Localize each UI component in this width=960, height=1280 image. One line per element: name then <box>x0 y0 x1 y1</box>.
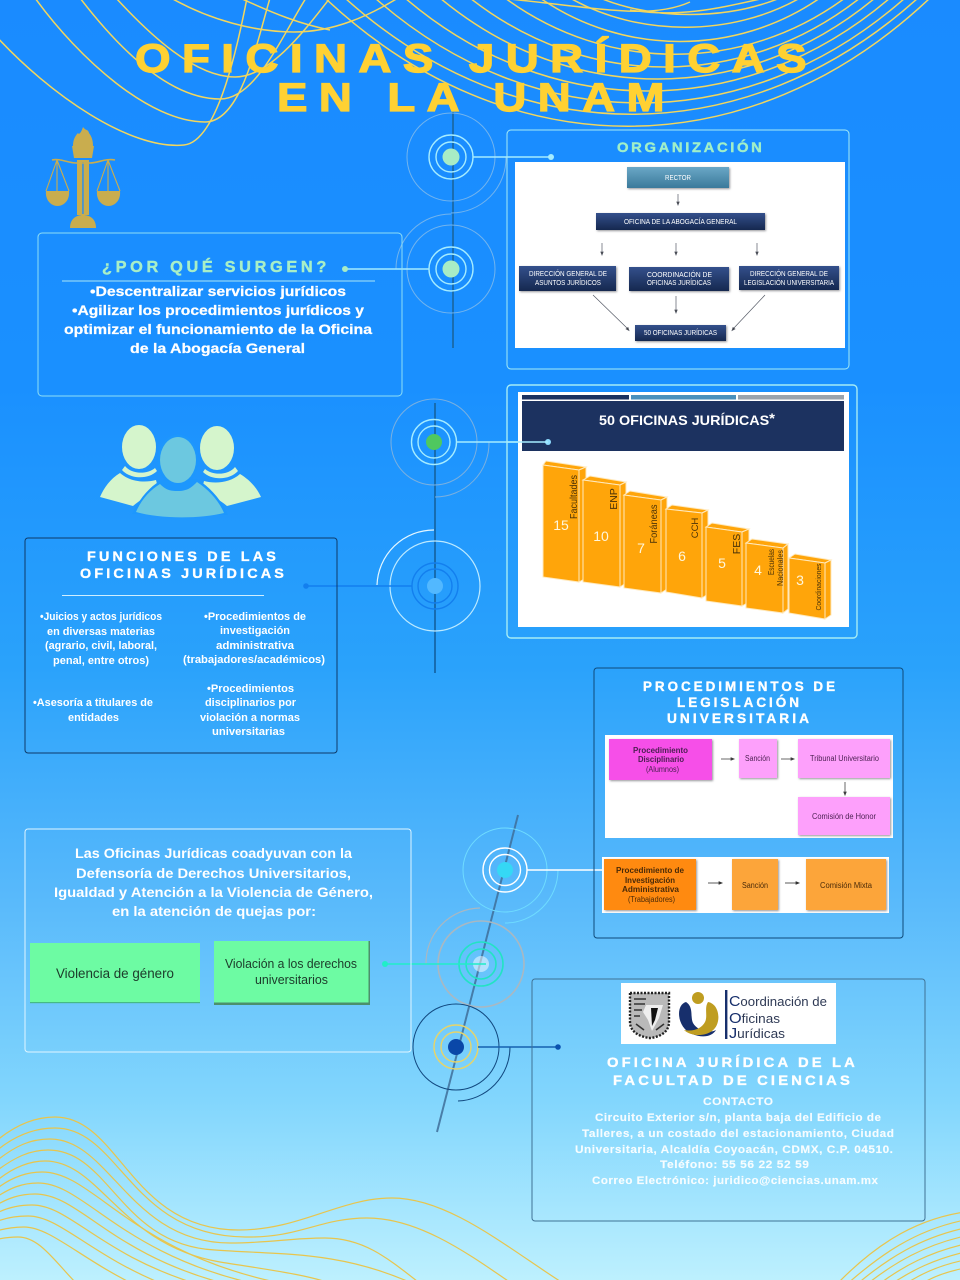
box: violación a los derechos: universitarios <box>255 973 328 987</box>
panel: defensoría <box>25 829 411 1052</box>
org chart: LEGISLACIÓN UNIVERSITARIA <box>744 278 834 287</box>
flow: procedimiento disciplinario <box>605 735 893 838</box>
list: funciones derecha <box>183 611 325 738</box>
list: funciones derecha: •Procedimientos <box>207 683 294 695</box>
panel: funciones <box>25 538 337 753</box>
logos <box>621 983 836 1044</box>
header band <box>522 401 844 451</box>
node: funciones <box>303 530 480 631</box>
title: OFICINAS JURÍDICAS <box>135 36 818 81</box>
flow: investigación administrativa: Comisión Mixta <box>820 881 873 890</box>
text: contacto: Correo Electrónico: juridico@ciencias.unam.mx <box>592 1175 879 1187</box>
list: funciones derecha: violación a normas <box>200 712 300 724</box>
stepped bar chart: 6 <box>678 548 686 564</box>
flow: procedimiento disciplinario: Tribunal Universitario <box>810 754 879 763</box>
stepped bar chart <box>543 461 831 619</box>
text: defensoría: Defensoría de Derechos Universitarios, <box>76 865 351 881</box>
title <box>135 36 818 120</box>
list: funciones izquierda: •Asesoría a titulares de <box>33 697 153 709</box>
text: contacto: Universitaria, Alcaldía Coyoacán, CDMX, C.P. 04510. <box>575 1144 894 1156</box>
decorative waves top <box>0 0 930 145</box>
node: contacto <box>413 1004 561 1101</box>
panel: contacto <box>532 979 925 1221</box>
list: funciones derecha: •Procedimientos de <box>204 611 306 623</box>
text: motivos: de la Abogacía General <box>130 341 305 356</box>
timeline: lower diagonal axis <box>437 815 518 1132</box>
text: motivos: •Descentralizar servicios jurídicos <box>90 284 346 299</box>
stepped bar chart: 5 <box>718 555 726 571</box>
panel: por qué surgen <box>38 233 402 396</box>
stepped bar chart: 4 <box>754 562 762 578</box>
stepped bar chart: Facultades <box>568 475 580 519</box>
list: funciones izquierda: (agrario, civil, laboral, <box>45 640 157 652</box>
org chart: OFICINAS JURÍDICAS <box>647 278 711 287</box>
box: violación a los derechos <box>214 941 370 1005</box>
timeline: upper vertical axis <box>452 112 454 348</box>
flow: investigación administrativa <box>602 857 889 913</box>
list: funciones izquierda: entidades <box>68 712 119 724</box>
panel: procedimientos de legislación <box>594 668 903 938</box>
heading: por qué surgen: ¿POR QUÉ SURGEN? <box>102 257 330 276</box>
text: motivos: optimizar el funcionamiento de la Oficina <box>64 322 373 337</box>
list: funciones derecha: universitarias <box>212 726 285 738</box>
stepped bar chart: Coordinaciones <box>814 563 823 610</box>
icon: group of people <box>100 425 261 517</box>
org chart <box>515 154 845 348</box>
node: por qué surgen <box>342 214 495 313</box>
list: funciones izquierda: en diversas materias <box>47 626 155 638</box>
header band: 50 OFICINAS JURÍDICAS <box>599 413 759 428</box>
org chart: OFICINA DE LA ABOGACÍA GENERAL <box>624 217 737 226</box>
box: violación a los derechos: Violación a los derechos <box>225 957 357 971</box>
panel: organización <box>507 130 849 369</box>
heading: funciones <box>80 549 287 581</box>
stepped bar chart: 3 <box>796 572 804 588</box>
title: EN LA UNAM <box>277 76 676 120</box>
text: contacto: Teléfono: 55 56 22 52 59 <box>660 1159 810 1171</box>
heading: funciones: FUNCIONES DE LAS <box>87 549 279 564</box>
heading: organización: ORGANIZACIÓN <box>617 138 764 155</box>
list: funciones izquierda: •Juicios y actos jurídicos <box>40 611 162 623</box>
text: contacto: Circuito Exterior s/n, planta baja del Edificio de <box>595 1112 882 1124</box>
text: coordinación <box>729 993 827 1042</box>
stepped bar chart: CCH <box>690 518 701 538</box>
text: defensoría: en la atención de quejas por: <box>112 903 316 919</box>
org chart: 50 OFICINAS JURÍDICAS <box>644 328 717 337</box>
stepped bar chart: Escuelas <box>767 549 776 575</box>
org chart: RECTOR <box>665 175 691 182</box>
list: funciones izquierda <box>33 611 162 724</box>
flow: procedimiento disciplinario: Sanción <box>745 754 770 763</box>
icon: scales of justice with torch <box>46 127 120 228</box>
text: coordinación: Coordinación de <box>729 993 827 1010</box>
stepped bar chart: Nacionales <box>776 550 785 586</box>
node: procedimientos <box>463 828 602 923</box>
flow: procedimiento disciplinario: Procedimiento <box>633 746 688 755</box>
flow: investigación administrativa: Sanción <box>742 881 768 890</box>
list: funciones derecha: disciplinarios por <box>205 697 297 709</box>
stepped bar chart: 10 <box>593 528 609 544</box>
panel: 50 oficinas jurídicas <box>507 385 857 638</box>
stepped bar chart: FES <box>731 534 743 554</box>
flow: procedimiento disciplinario: Disciplinario <box>638 755 684 764</box>
timeline: middle vertical axis <box>434 403 436 673</box>
list: funciones izquierda: penal, entre otros) <box>53 655 149 667</box>
heading: oficina facultad: OFICINA JURÍDICA DE LA <box>607 1054 858 1070</box>
flow: investigación administrativa: (Trabajadores) <box>628 895 675 904</box>
heading: oficina facultad: FACULTAD DE CIENCIAS <box>613 1072 853 1088</box>
text: contacto <box>575 1096 894 1187</box>
color strip <box>522 395 844 400</box>
list: funciones derecha: investigación <box>220 625 290 637</box>
flow: investigación administrativa: Administrativa <box>622 885 680 894</box>
flow: investigación administrativa: Investigación <box>625 876 675 885</box>
text: motivos <box>64 284 373 356</box>
heading: procedimientos: PROCEDIMIENTOS DE <box>643 679 838 694</box>
heading: procedimientos <box>643 679 838 726</box>
icon: UNAM crest <box>630 993 669 1038</box>
text: coordinación: Jurídicas <box>729 1025 785 1042</box>
flow: investigación administrativa: Procedimiento de <box>616 866 685 875</box>
flow: procedimiento disciplinario: Comisión de Honor <box>812 812 876 821</box>
node: defensoría <box>382 908 524 1007</box>
box: violencia de género <box>30 943 200 1003</box>
heading: procedimientos: UNIVERSITARIA <box>667 711 812 726</box>
org chart: COORDINACIÓN DE <box>647 270 712 279</box>
text: contacto: Talleres, a un costado del estacionamiento, Ciudad <box>582 1128 894 1140</box>
text: defensoría: Las Oficinas Jurídicas coadyuvan con la <box>75 845 352 861</box>
stepped bar chart: 15 <box>553 517 569 533</box>
icon: COJ mark <box>679 990 727 1039</box>
text: defensoría: Igualdad y Atención a la Violencia de Género, <box>54 884 373 900</box>
heading: oficina facultad <box>607 1054 858 1088</box>
decorative waves bottom <box>0 1117 960 1280</box>
text: defensoría <box>54 845 373 919</box>
stepped bar chart: Foráneas <box>648 504 660 544</box>
header band: * <box>769 410 776 426</box>
text: coordinación: Oficinas <box>729 1010 780 1027</box>
flow: procedimiento disciplinario: (Alumnos) <box>646 765 679 774</box>
node: organización <box>407 113 551 213</box>
list: funciones derecha: administrativa <box>216 640 295 652</box>
org chart: ASUNTOS JURÍDICOS <box>535 278 601 287</box>
heading: procedimientos: LEGISLACIÓN <box>677 695 802 710</box>
stepped bar chart: ENP <box>608 488 620 510</box>
box: violencia de género: Violencia de género <box>56 966 174 981</box>
text: contacto: CONTACTO <box>703 1096 774 1108</box>
list: funciones derecha: (trabajadores/académicos) <box>183 654 325 666</box>
node: 50 oficinas <box>391 399 548 497</box>
text: motivos: •Agilizar los procedimientos jurídicos y <box>72 303 365 318</box>
heading: funciones: OFICINAS JURÍDICAS <box>80 566 287 581</box>
stepped bar chart: 7 <box>637 540 645 556</box>
org chart: DIRECCIÓN GENERAL DE <box>750 269 828 278</box>
org chart: DIRECCIÓN GENERAL DE <box>529 269 607 278</box>
